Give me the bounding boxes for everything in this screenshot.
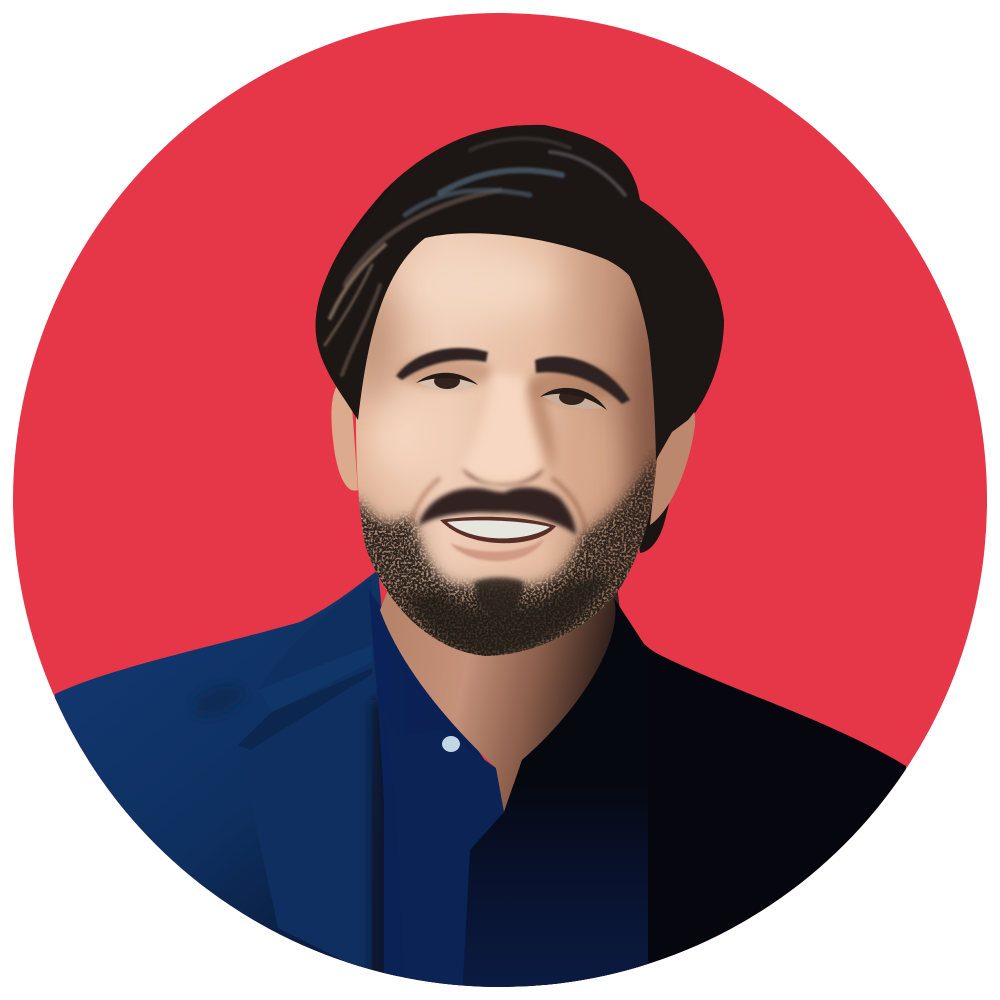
neck bbox=[380, 591, 620, 812]
lower lip bbox=[450, 538, 545, 561]
jacket lapel bbox=[259, 751, 372, 970]
cheek stubble bbox=[350, 450, 658, 670]
chin beard bbox=[400, 570, 610, 658]
dark right collar bbox=[462, 598, 648, 1000]
jacket right side bbox=[520, 644, 906, 986]
shirt left collar bbox=[404, 760, 498, 986]
right ear bbox=[650, 405, 695, 525]
shirt bbox=[369, 590, 640, 1000]
jacket shadows bbox=[195, 686, 245, 716]
portrait figure bbox=[55, 125, 906, 1000]
nose bbox=[463, 372, 542, 482]
smile lines bbox=[410, 478, 440, 525]
soul patch bbox=[474, 578, 524, 615]
top hair bbox=[316, 125, 724, 460]
back hair bbox=[316, 125, 724, 553]
left eye bbox=[416, 373, 478, 390]
right eye bbox=[540, 388, 607, 410]
shirt button bbox=[442, 736, 460, 752]
nose side shadow bbox=[528, 385, 555, 472]
mouth bbox=[440, 517, 556, 543]
eye socket shadows bbox=[397, 356, 493, 388]
teeth bbox=[447, 520, 550, 538]
nostril shadow bbox=[462, 468, 544, 485]
face bbox=[356, 233, 657, 656]
cheek skin tone under stubble bbox=[359, 476, 652, 656]
lapel notch fold bbox=[258, 645, 372, 712]
left ear bbox=[331, 378, 358, 491]
moustache bbox=[419, 487, 576, 535]
facial shading and beard bbox=[350, 250, 670, 670]
right eyebrow bbox=[535, 356, 630, 404]
hair highlights bbox=[325, 138, 625, 375]
jacket left side bbox=[55, 570, 400, 1000]
left eyebrow bbox=[396, 348, 488, 380]
